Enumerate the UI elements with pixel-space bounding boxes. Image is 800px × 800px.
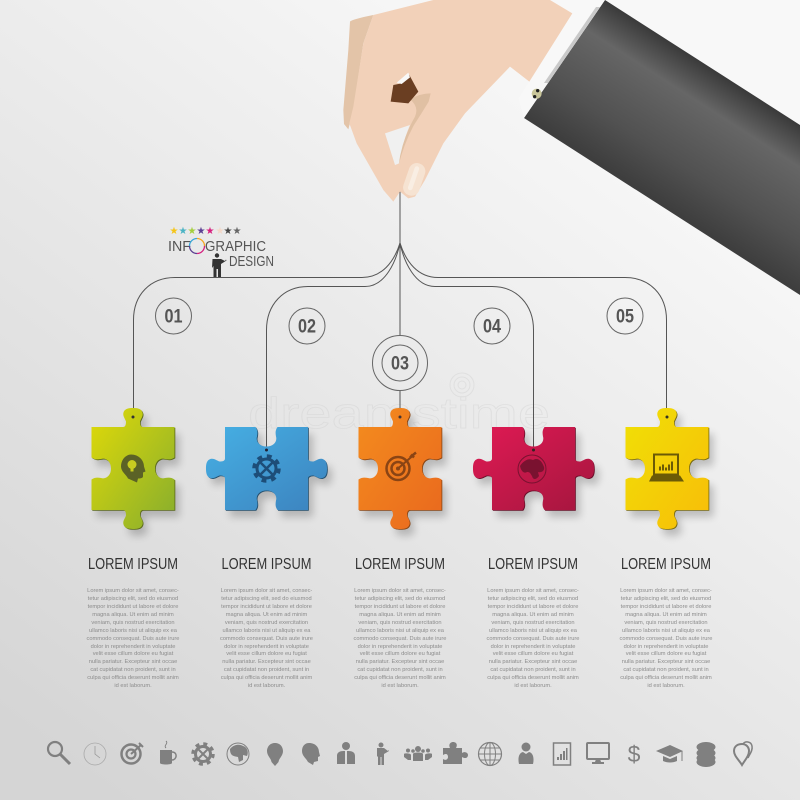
column 2 text: ullamco laboris nisi ut aliquip ex ea (223, 628, 311, 634)
icon: dollar: $ (628, 741, 641, 767)
number 05 (607, 298, 643, 334)
column 2 text: velit esse cillum dolore eu fugiat (226, 651, 307, 657)
column 5 text: veniam, quis nostrud exercitation (624, 620, 708, 626)
logo: infographic design: DESIGN (229, 254, 274, 270)
cuff button (532, 89, 542, 99)
column 4 text: veniam, quis nostrud exercitation (491, 620, 575, 626)
icon: target (122, 743, 143, 764)
column 2 text (220, 556, 313, 689)
column 4 text: commodo consequat. Duis aute irure (487, 636, 579, 642)
icon: coffee cup (160, 741, 176, 764)
column 1 text: id est laborum. (114, 683, 152, 689)
column 4 text: ullamco laboris nisi ut aliquip ex ea (489, 628, 578, 634)
column 3 text: commodo consequat. Duis aute irure (354, 636, 446, 642)
connector lines (134, 190, 666, 450)
column 3 text: tempor incididunt ut labore et dolore (355, 604, 445, 610)
column 4 text: magna aliqua. Ut enim ad minim (492, 612, 574, 618)
puzzle piece 5: yellow (626, 408, 714, 536)
column 4 text: cat cupidatat non proident, sunt in (490, 667, 576, 673)
icon: graduation cap (656, 745, 683, 762)
icon: monitor (587, 743, 609, 764)
column 1 text: magna aliqua. Ut enim ad minim (92, 612, 174, 618)
column 3 text: culpa qui officia deserunt mollit anim (354, 675, 446, 681)
icon: presenter (377, 742, 389, 765)
column 1 text: commodo consequat. Duis aute irure (87, 636, 179, 642)
column 1 text: nulla pariatur. Excepteur sint occae (89, 659, 177, 665)
column 5 text: commodo consequat. Duis aute irure (620, 636, 712, 642)
column 4 text: dolor in reprehenderit in voluptate (491, 644, 575, 650)
icon: puzzle (443, 742, 468, 764)
column 1 text: velit esse cillum dolore eu fugiat (93, 651, 174, 657)
icon: map pins (734, 742, 752, 765)
column 5 text: cat cupidatat non proident, sunt in (623, 667, 709, 673)
palm and fingers (349, 0, 572, 202)
column 4 text: velit esse cillum dolore eu fugiat (493, 651, 574, 657)
column 1 text: Lorem ipsum dolor sit amet, consec- (87, 588, 179, 594)
column 2 text: veniam, quis nostrud exercitation (225, 620, 308, 626)
fingernail (401, 161, 428, 198)
column 2 text: commodo consequat. Duis aute irure (220, 636, 313, 642)
column 1 text: tempor incididunt ut labore et dolore (88, 604, 178, 610)
column 2 text: magna aliqua. Ut enim ad minim (226, 612, 308, 618)
column 5 text: id est laborum. (647, 683, 685, 689)
column 3 text: magna aliqua. Ut enim ad minim (359, 612, 441, 618)
column 5 text: ullamco laboris nisi ut aliquip ex ea (622, 628, 711, 634)
column 1 text: dolor in reprehenderit in voluptate (91, 644, 175, 650)
column 5 text: Lorem ipsum dolor sit amet, consec- (620, 588, 712, 594)
jacket sleeve (524, 0, 800, 295)
dark hole (391, 75, 418, 103)
stars: ★ (170, 226, 179, 237)
column 1 text: LOREM IPSUM (88, 556, 178, 573)
column 5 text: velit esse cillum dolore eu fugiat (626, 651, 707, 657)
presenter figure (212, 253, 226, 277)
column 3 text: LOREM IPSUM (355, 556, 445, 573)
column 5 text: tempor incididunt ut labore et dolore (621, 604, 711, 610)
icon: head with bulb (121, 454, 146, 482)
column 2 text: Lorem ipsum dolor sit amet, consec- (221, 588, 312, 594)
logo: infographic design (168, 226, 274, 277)
icon: team (404, 746, 432, 761)
column 5 text: dolor in reprehenderit in voluptate (624, 644, 708, 650)
stars: ★ (224, 226, 233, 237)
number 01: 01 (164, 306, 183, 328)
icon: businessperson (337, 742, 355, 764)
column 4 text: nulla pariatur. Excepteur sint occae (489, 659, 577, 665)
column 2 text: cat cupidatat non proident, sunt in (224, 667, 309, 673)
column 1 text: tetur adipiscing elit, sed do eiusmod (88, 596, 178, 602)
column 1 text: veniam, quis nostrud exercitation (91, 620, 175, 626)
column 2 text: nulla pariatur. Excepteur sint occae (222, 659, 311, 665)
stars: ★ (206, 226, 215, 237)
hand (343, 0, 605, 202)
icon: monitor (649, 454, 684, 482)
watermark: dreamstime (248, 389, 550, 438)
shirt cuff (518, 0, 605, 118)
column 3 text: dolor in reprehenderit in voluptate (358, 644, 442, 650)
icon: clock (84, 743, 106, 765)
stars: ★ (188, 226, 197, 237)
column 2 text: id est laborum. (248, 683, 286, 689)
number 02 (289, 308, 325, 344)
number 02: 02 (298, 316, 316, 338)
back of fingers (343, 15, 373, 129)
column 4 text: tetur adipiscing elit, sed do eiusmod (488, 596, 578, 602)
stars (170, 226, 242, 237)
icon: gear (193, 744, 213, 764)
column 3 text: id est laborum. (381, 683, 419, 689)
puzzle piece 1: green (92, 408, 180, 536)
thumb shading (399, 93, 431, 165)
stars: ★ (233, 226, 242, 237)
column 1 text: cat cupidatat non proident, sunt in (90, 667, 176, 673)
column 3 text (354, 556, 446, 689)
icon: light bulb (267, 743, 283, 766)
column 4 text: Lorem ipsum dolor sit amet, consec- (487, 588, 579, 594)
column 4 text: culpa qui officia deserunt mollit anim (487, 675, 579, 681)
column 5 text (620, 556, 712, 689)
stars: ★ (197, 226, 206, 237)
icon: gear (254, 456, 278, 480)
number 01 (156, 298, 192, 334)
column 4 text (487, 556, 579, 689)
column 1 text: ullamco laboris nisi ut aliquip ex ea (89, 628, 178, 634)
column 3 text: tetur adipiscing elit, sed do eiusmod (355, 596, 445, 602)
icon: magnifier (48, 742, 70, 764)
watermark (248, 373, 550, 438)
puzzle piece 2: blue (206, 427, 332, 517)
icon: head (302, 743, 320, 765)
column 4 text: tempor incididunt ut labore et dolore (488, 604, 578, 610)
column 5 text: LOREM IPSUM (621, 556, 711, 573)
column 3 text: veniam, quis nostrud exercitation (358, 620, 442, 626)
column 3 text: nulla pariatur. Excepteur sint occae (356, 659, 444, 665)
column 5 text: culpa qui officia deserunt mollit anim (620, 675, 712, 681)
logo: infographic design: GRAPHIC (205, 239, 266, 255)
number 03: 03 (391, 354, 409, 374)
column 5 text: magna aliqua. Ut enim ad minim (625, 612, 707, 618)
column 4 text: LOREM IPSUM (488, 556, 578, 573)
gap between finger and thumb (385, 125, 410, 165)
column 3 text: cat cupidatat non proident, sunt in (357, 667, 443, 673)
column 2 text: dolor in reprehenderit in voluptate (224, 644, 309, 650)
logo: infographic design: INF (168, 239, 191, 255)
column 3 text: velit esse cillum dolore eu fugiat (360, 651, 441, 657)
icon: wire globe (478, 742, 502, 766)
icon: target (386, 452, 416, 480)
icon: coins (696, 742, 716, 767)
bottom icon row (48, 741, 752, 767)
number 04 (474, 308, 510, 344)
rainbow O (190, 238, 204, 254)
column 2 text: LOREM IPSUM (222, 556, 312, 573)
icon: globe (518, 455, 546, 483)
column 5 text: tetur adipiscing elit, sed do eiusmod (621, 596, 711, 602)
puzzle piece 4: crimson (473, 427, 599, 517)
number 04: 04 (483, 316, 501, 338)
number 03 (372, 336, 428, 390)
icon: user (518, 742, 534, 764)
column 2 text: tetur adipiscing elit, sed do eiusmod (221, 596, 312, 602)
number 05: 05 (616, 306, 634, 328)
column 3 text: ullamco laboris nisi ut aliquip ex ea (356, 628, 445, 634)
stars: ★ (179, 226, 188, 237)
column 2 text: tempor incididunt ut labore et dolore (221, 604, 312, 610)
column 4 text: id est laborum. (514, 683, 552, 689)
stars: ★ (216, 226, 225, 237)
column 3 text: Lorem ipsum dolor sit amet, consec- (354, 588, 446, 594)
column 1 text (87, 556, 179, 689)
column 2 text: culpa qui officia deserunt mollit anim (221, 675, 313, 681)
icon: chart tablet (554, 743, 570, 765)
puzzle piece 3: orange (358, 408, 446, 536)
icon: earth (227, 743, 249, 765)
column 1 text: culpa qui officia deserunt mollit anim (87, 675, 179, 681)
column 5 text: nulla pariatur. Excepteur sint occae (622, 659, 710, 665)
